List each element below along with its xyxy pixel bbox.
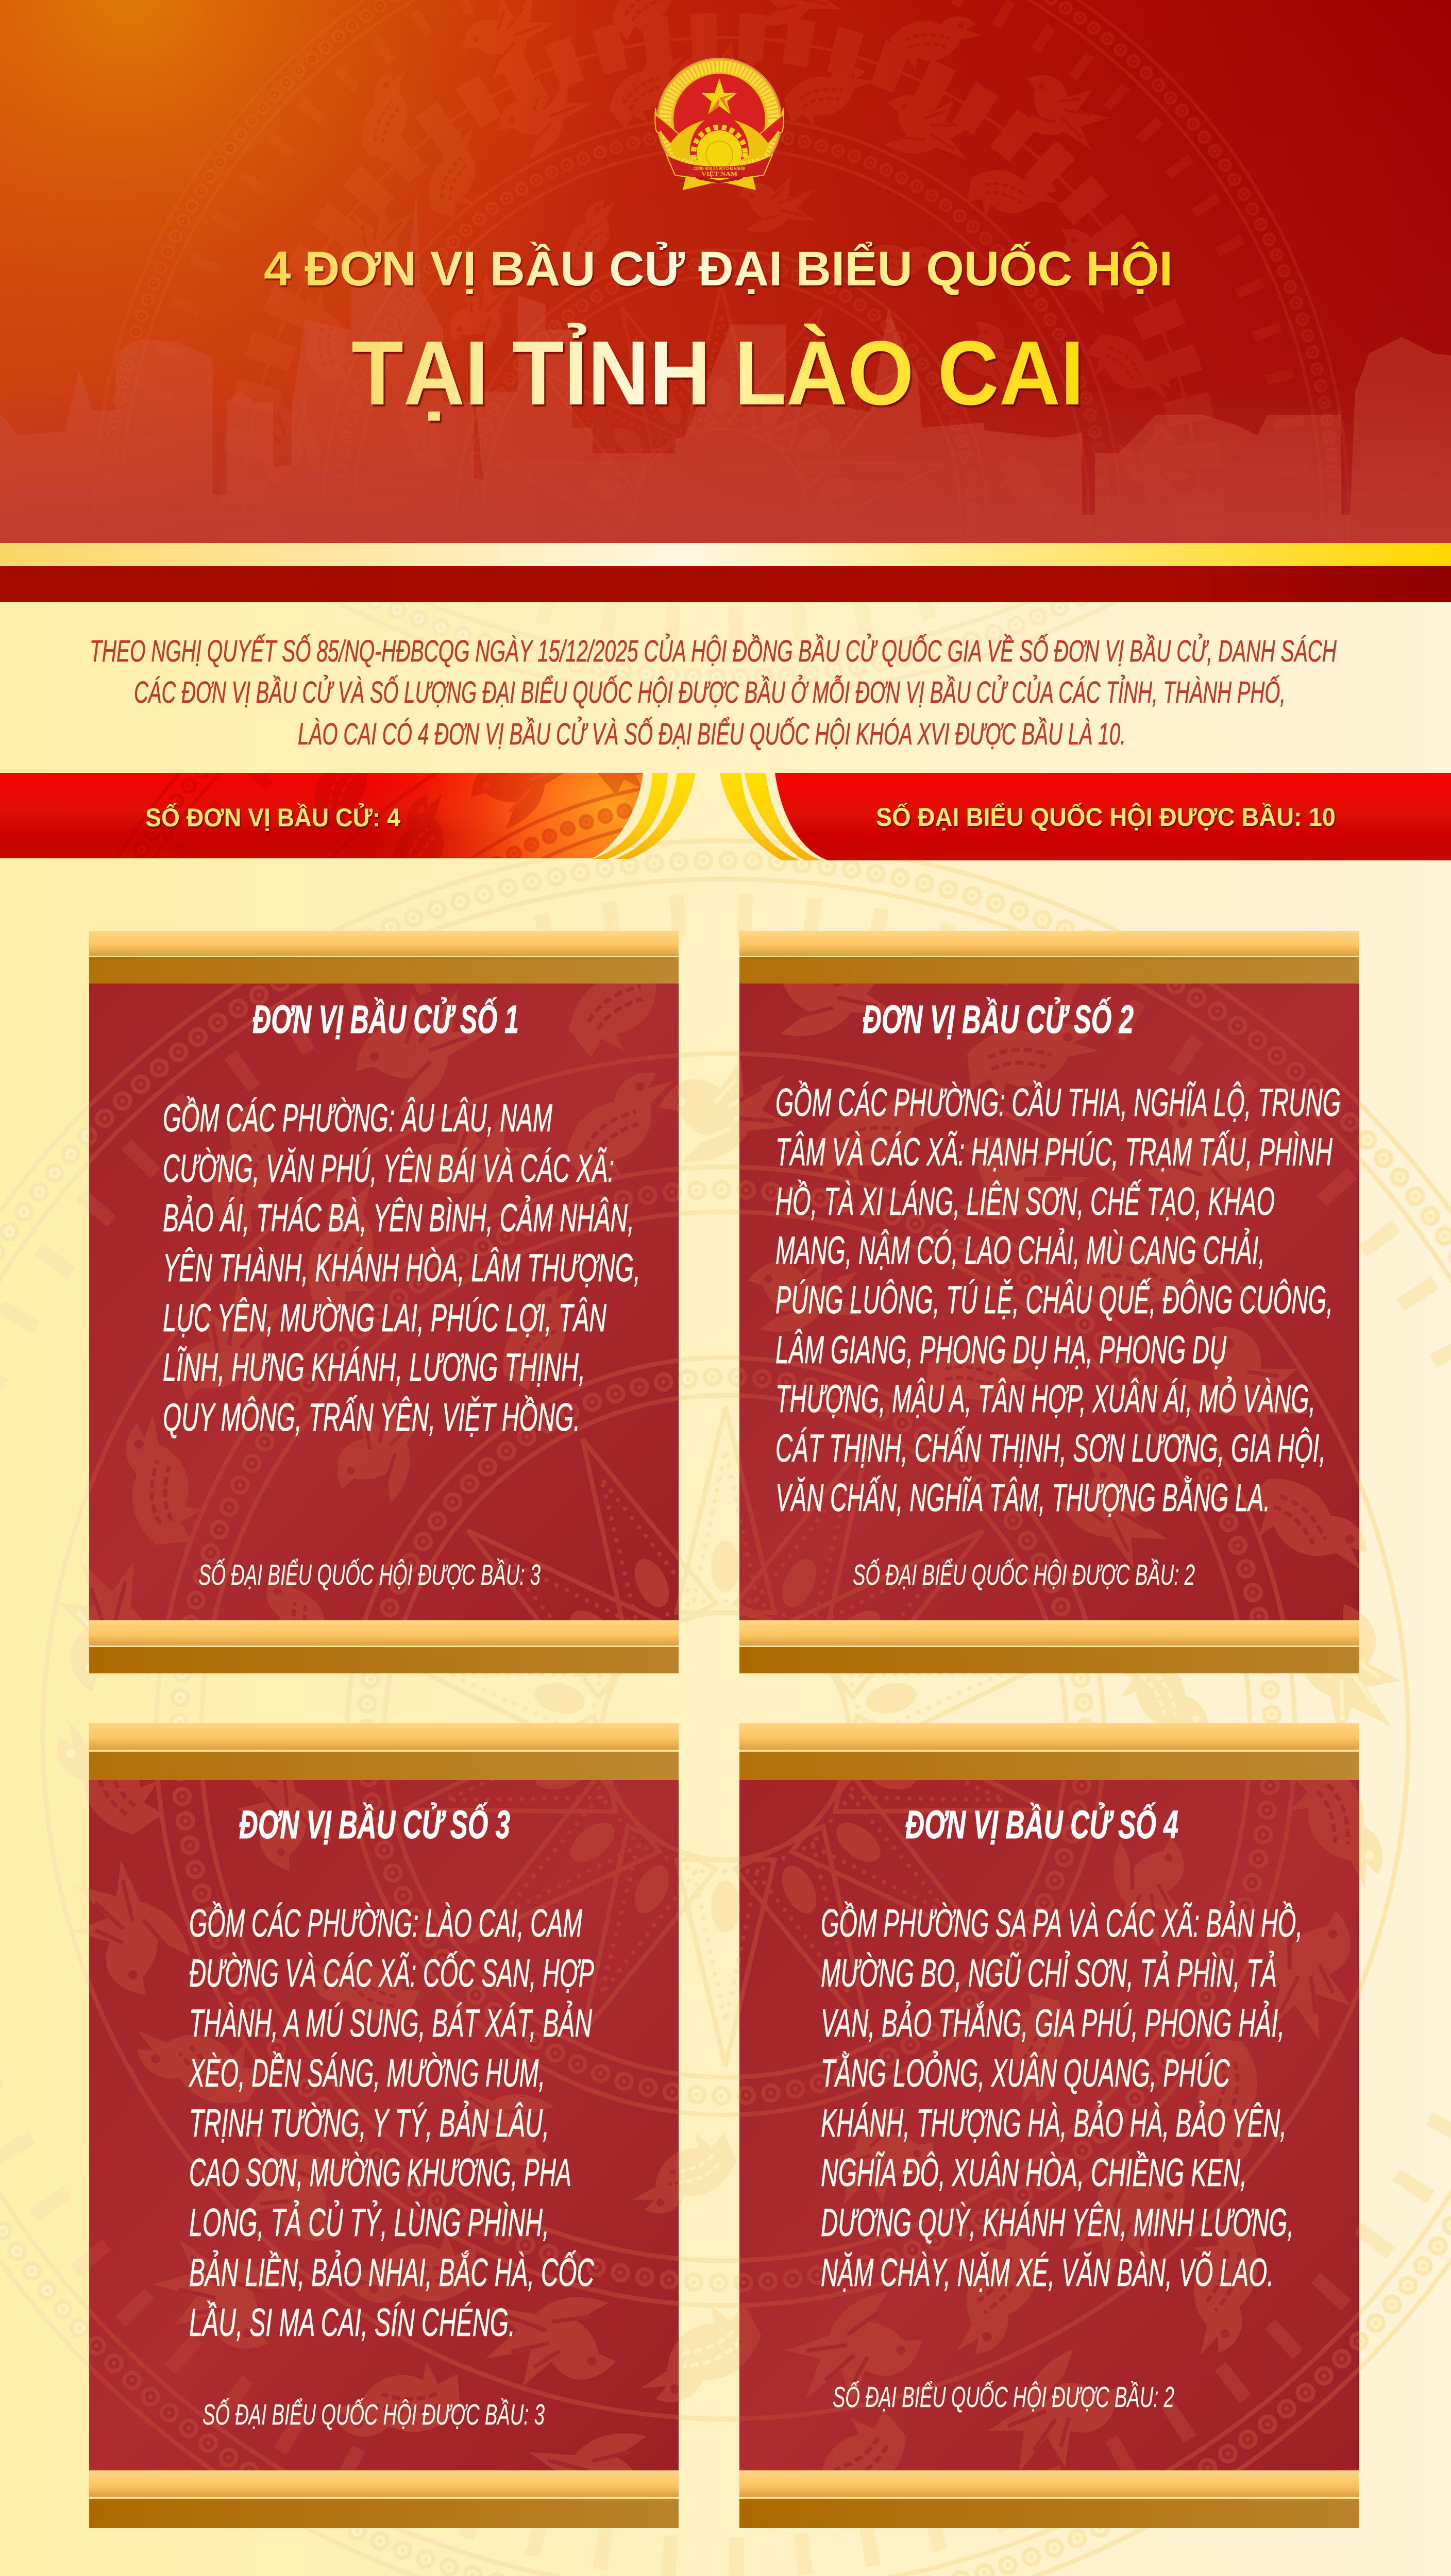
ward list: LONG, TẢ CỦ TỶ, LÙNG PHÌNH, <box>189 2200 549 2245</box>
ward list <box>163 1096 640 1439</box>
panel: constituency 2 <box>0 841 1451 2576</box>
ward list: GỒM CÁC PHƯỜNG: LÀO CAI, CAM <box>189 1902 582 1945</box>
ward list: LẦU, SI MA CAI, SÍN CHÉNG. <box>189 2301 515 2345</box>
intro text block <box>90 633 1337 751</box>
ward list: THÀNH, A MÚ SUNG, BÁT XÁT, BẢN <box>189 2001 592 2045</box>
ward list: TRỊNH TƯỜNG, Y TÝ, BẢN LÂU, <box>189 2100 549 2145</box>
deputies count: SỐ ĐẠI BIỂU QUỐC HỘI ĐƯỢC BẦU: 3 <box>203 2398 545 2431</box>
heading: ĐƠN VỊ BẦU CỬ SỐ 3 <box>239 1802 510 1847</box>
panel: constituency 3 <box>0 841 1451 2576</box>
ribbon: number of constituencies <box>0 773 790 859</box>
heading: ĐƠN VỊ BẦU CỬ SỐ 4 <box>905 1802 1178 1847</box>
ward list <box>775 1081 1341 1520</box>
ward list: XÈO, DỀN SÁNG, MƯỜNG HUM, <box>189 2052 545 2095</box>
dark red stripe <box>0 566 1451 602</box>
ward list: LĨNH, HƯNG KHÁNH, LƯƠNG THỊNH, <box>163 1346 585 1389</box>
background: cream panel with bronze drum pattern <box>0 602 1451 2576</box>
title line 2: TẠI TỈNH LÀO CAI <box>351 322 1084 424</box>
ward list: BẢN LIỀN, BẢO NHAI, BẮC HÀ, CỐC <box>189 2250 595 2295</box>
ribbon: number of constituencies: SỐ ĐƠN VỊ BẦU CỬ: 4 <box>145 803 400 832</box>
city skyline silhouette <box>0 193 1451 543</box>
ward list <box>821 1901 1303 2295</box>
gold strip left <box>593 773 696 859</box>
ribbon: number of deputies: SỐ ĐẠI BIỂU QUỐC HỘI ĐƯỢC BẦU: 10 <box>876 802 1336 832</box>
ward list: QUY MÔNG, TRẤN YÊN, VIỆT HỒNG. <box>163 1395 580 1439</box>
icon: national emblem of Vietnam: CỘNG HÒA XÃ HỘI CHỦ NGHĨA <box>694 165 745 171</box>
heading: ĐƠN VỊ BẦU CỬ SỐ 1 <box>252 997 519 1042</box>
icon: national emblem of Vietnam: VIỆT NAM <box>701 170 737 177</box>
ward list: CAO SƠN, MƯỜNG KHƯƠNG, PHA <box>189 2151 571 2195</box>
header banner <box>0 0 1451 543</box>
icon: national emblem of Vietnam <box>655 58 784 190</box>
ribbon: number of deputies <box>720 773 1451 860</box>
ward list: LỤC YÊN, MƯỜNG LAI, PHÚC LỢI, TÂN <box>163 1296 606 1340</box>
deputies count: SỐ ĐẠI BIỂU QUỐC HỘI ĐƯỢC BẦU: 2 <box>833 2380 1174 2414</box>
ward list <box>189 1902 595 2345</box>
panel: constituency 4 <box>0 841 1451 2576</box>
ward list: GỒM CÁC PHƯỜNG: ÂU LÂU, NAM <box>163 1096 552 1140</box>
panel: constituency 1 <box>89 931 679 1673</box>
gold stripe <box>0 543 1451 566</box>
ward list: ĐƯỜNG VÀ CÁC XÃ: CỐC SAN, HỢP <box>189 1952 594 1995</box>
ward list: CƯỜNG, VĂN PHÚ, YÊN BÁI VÀ CÁC XÃ: <box>163 1147 614 1191</box>
deputies count: SỐ ĐẠI BIỂU QUỐC HỘI ĐƯỢC BẦU: 3 <box>198 1558 541 1591</box>
ward list: YÊN THÀNH, KHÁNH HÒA, LÂM THƯỢNG, <box>163 1246 640 1290</box>
ward list: BẢO ÁI, THÁC BÀ, YÊN BÌNH, CẢM NHÂN, <box>163 1195 634 1240</box>
heading: ĐƠN VỊ BẦU CỬ SỐ 2 <box>863 997 1134 1042</box>
title line 1: 4 ĐƠN VỊ BẦU CỬ ĐẠI BIỂU QUỐC HỘI <box>264 242 1173 296</box>
deputies count: SỐ ĐẠI BIỂU QUỐC HỘI ĐƯỢC BẦU: 2 <box>853 1558 1195 1591</box>
